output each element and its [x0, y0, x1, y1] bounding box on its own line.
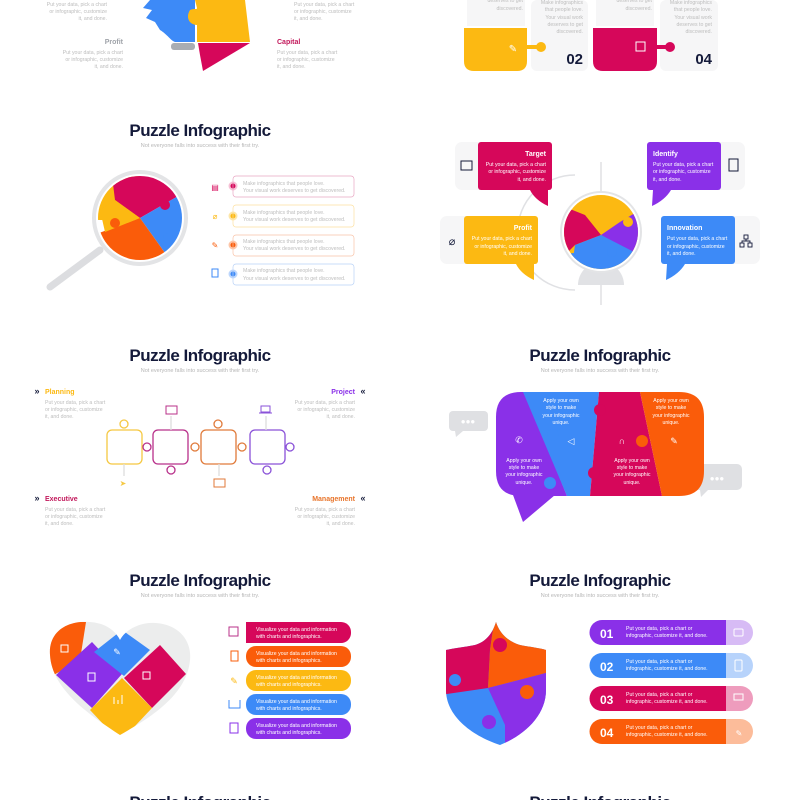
- yellow block: [464, 28, 546, 71]
- big puzzle bubble: Apply your own: [506, 458, 542, 464]
- label: Capital: [277, 39, 338, 70]
- label: Project: Put your data, pick a chart: [295, 400, 356, 406]
- magnifier graphic: [50, 160, 190, 287]
- slide: shield puzzle: [440, 571, 753, 750]
- card 02: Make infographics: [541, 0, 583, 6]
- list items: Your visual work deserves to get discovered.: [243, 188, 345, 194]
- bars list: with charts and infographics.: [256, 730, 322, 736]
- numbered bars: infographic, customize it, and done.: [626, 633, 708, 639]
- callout: Identify: Identify: [653, 151, 678, 158]
- bars list: with charts and infographics.: [256, 634, 322, 640]
- subtitle: Not everyone falls into success with their first try.: [141, 368, 260, 374]
- list items: Make infographics that people love.: [243, 239, 325, 245]
- card 04: 04: [695, 51, 713, 68]
- callout: Innovation: [661, 216, 760, 280]
- outline puzzle pieces: [107, 416, 294, 476]
- label: Executive: »: [34, 493, 40, 503]
- icons on puzzle row: ➤: [120, 479, 127, 488]
- label: Management: «: [360, 493, 366, 503]
- title: Puzzle Infographic: [129, 346, 271, 365]
- callout: Identify: [647, 142, 745, 206]
- slide: globe callouts: [440, 142, 760, 305]
- slide: outline puzzle row: [34, 346, 366, 527]
- bars list: with charts and infographics.: [256, 682, 322, 688]
- big puzzle bubble: your infographic: [506, 472, 543, 478]
- big puzzle bubble: unique.: [623, 480, 641, 486]
- label: Management: or infographic, customize: [297, 514, 355, 520]
- callout: Target: [455, 142, 552, 206]
- subtitle: Not everyone falls into success with their first try.: [141, 593, 260, 599]
- slide: puzzle cards (partial top-right): discovered.: [496, 6, 523, 12]
- slide: magnifier: [50, 121, 354, 287]
- small speech bubbles: [449, 411, 742, 497]
- numbered bars: 03: [600, 693, 614, 707]
- card 04: deserves to get: [677, 22, 713, 28]
- callout: Profit: ⌀: [449, 236, 456, 248]
- slide: puzzle cards (partial top-right): discovered.: [625, 6, 652, 12]
- label: Profit: [63, 39, 124, 70]
- numbered bars: 01: [600, 627, 614, 641]
- big puzzle bubble: Apply your own: [543, 398, 579, 404]
- big puzzle bubble: ✆: [515, 435, 523, 445]
- numbered bars: [590, 620, 753, 744]
- list items: ⌀: [213, 212, 218, 221]
- list items: Your visual work deserves to get discovered.: [243, 246, 345, 252]
- icons on puzzle row: [120, 406, 272, 488]
- list items: Make infographics that people love.: [243, 268, 325, 274]
- label: Profit: or infographic, customize: [65, 57, 123, 63]
- bars list: Visualize your data and information: [256, 627, 337, 633]
- label: Executive: [34, 493, 106, 527]
- label: Planning: [34, 386, 106, 420]
- numbered bars: Put your data, pick a chart or: [626, 626, 693, 632]
- callout: Profit: Profit: [514, 225, 533, 232]
- list items: [211, 176, 354, 285]
- big puzzle bubble: style to make: [546, 405, 576, 411]
- card 04: Make infographics: [670, 0, 712, 6]
- big puzzle bubble: Apply your own: [614, 458, 650, 464]
- heart graphic: ✎: [113, 647, 121, 657]
- text: right top: it, and done.: [294, 16, 323, 22]
- label: Profit: Profit: [105, 39, 124, 46]
- callout: Identify: or infographic, customize: [653, 169, 711, 175]
- small speech bubbles: ●●●: [710, 474, 724, 483]
- label: Capital: Put your data, pick a chart: [277, 50, 338, 56]
- callout: Target: it, and done.: [517, 177, 546, 183]
- label: Profit: it, and done.: [94, 64, 123, 70]
- subtitle: Not everyone falls into success with their first try.: [541, 368, 660, 374]
- label: Planning: or infographic, customize: [45, 407, 103, 413]
- big puzzle bubble: style to make: [509, 465, 539, 471]
- slide: speech bubble puzzle: [449, 346, 742, 522]
- text: left top: or infographic, customize: [49, 9, 107, 15]
- big puzzle bubble: your infographic: [543, 413, 580, 419]
- label: Planning: Put your data, pick a chart: [45, 400, 106, 406]
- text: right top: Put your data, pick a chart: [294, 2, 355, 8]
- label: Management: Put your data, pick a chart: [295, 507, 356, 513]
- label: Capital: or infographic, customize: [277, 57, 335, 63]
- bars list: with charts and infographics.: [256, 706, 322, 712]
- label: Profit: Put your data, pick a chart: [63, 50, 124, 56]
- card 02: 02: [566, 51, 583, 68]
- callout: Innovation: Innovation: [667, 225, 702, 232]
- card 02: deserves to get: [548, 22, 584, 28]
- callout: Identify: it, and done.: [653, 177, 682, 183]
- bars list: Visualize your data and information: [256, 723, 337, 729]
- numbered bars: 04: [600, 726, 614, 740]
- label: Executive: Put your data, pick a chart: [45, 507, 106, 513]
- bars list: Visualize your data and information: [256, 675, 337, 681]
- text: right top: or infographic, customize: [294, 9, 352, 15]
- card 02: discovered.: [556, 29, 583, 35]
- label: Capital: it, and done.: [277, 64, 306, 70]
- title: Puzzle Infographic: [129, 571, 271, 590]
- label: Management: Management: [312, 496, 356, 503]
- big puzzle bubble: style to make: [656, 405, 686, 411]
- subtitle: Not everyone falls into success with their first try.: [141, 143, 260, 149]
- card 02: that people love.: [545, 7, 583, 13]
- label: Project: it, and done.: [326, 414, 355, 420]
- card 02: [531, 0, 588, 71]
- callout: Identify: Put your data, pick a chart: [653, 162, 714, 168]
- card 04: discovered.: [685, 29, 712, 35]
- label: Project: Project: [331, 389, 356, 396]
- card 02: Your visual work: [545, 15, 583, 21]
- bars list: Visualize your data and information: [256, 651, 337, 657]
- title: Puzzle Infographic: [129, 121, 271, 140]
- numbered bars: Put your data, pick a chart or: [626, 725, 693, 731]
- slide: head puzzle (partial top-left): [47, 0, 355, 71]
- numbered bars: infographic, customize it, and done.: [626, 732, 708, 738]
- text: left top: it, and done.: [78, 16, 107, 22]
- numbered bars: ✎: [736, 729, 742, 738]
- slide: heart puzzle: [45, 571, 351, 742]
- numbered bars: Put your data, pick a chart or: [626, 659, 693, 665]
- card 04: Your visual work: [674, 15, 712, 21]
- big puzzle bubble: unique.: [662, 420, 680, 426]
- list items: Your visual work deserves to get discovered.: [243, 276, 345, 282]
- card 04: [660, 0, 718, 71]
- bars list: Visualize your data and information: [256, 699, 337, 705]
- text: left top: Put your data, pick a chart: [47, 2, 108, 8]
- callout: Profit: [440, 216, 538, 280]
- label: Project: [295, 386, 366, 420]
- numbered bars: infographic, customize it, and done.: [626, 699, 708, 705]
- label: Capital: Capital: [277, 39, 300, 46]
- callout: Innovation: or infographic, customize: [667, 244, 725, 250]
- small speech bubbles: ●●●: [461, 417, 475, 426]
- label: Project: «: [360, 386, 366, 396]
- big puzzle bubble: your infographic: [653, 413, 690, 419]
- big puzzle bubble: your infographic: [614, 472, 651, 478]
- big puzzle bubble: ∩: [619, 436, 625, 446]
- numbered bars: 02: [600, 660, 614, 674]
- callout: Innovation: it, and done.: [667, 251, 696, 257]
- label: Executive: Executive: [45, 496, 78, 503]
- big puzzle bubble: unique.: [552, 420, 570, 426]
- big puzzle bubble: Apply your own: [653, 398, 689, 404]
- big puzzle bubble: style to make: [617, 465, 647, 471]
- partial titles at bottom: [129, 793, 671, 800]
- yellow block: ✎: [509, 44, 517, 55]
- text: right top: [294, 2, 355, 22]
- big puzzle bubble: unique.: [515, 480, 533, 486]
- label: Planning: Planning: [45, 389, 75, 396]
- title: Puzzle Infographic: [529, 346, 671, 365]
- list items: Make infographics that people love.: [243, 210, 325, 216]
- subtitle: Not everyone falls into success with their first try.: [541, 593, 660, 599]
- callout: Target: or infographic, customize: [488, 169, 546, 175]
- callout: Target: Target: [525, 151, 547, 158]
- big puzzle bubble: ◁: [568, 436, 575, 446]
- bars list: ✎: [230, 676, 238, 686]
- globe: [518, 162, 645, 305]
- label: Executive: it, and done.: [45, 521, 74, 527]
- callout: Target: Put your data, pick a chart: [486, 162, 547, 168]
- label: Planning: »: [34, 386, 40, 396]
- callout: Innovation: Put your data, pick a chart: [667, 236, 728, 242]
- big puzzle bubble: ✎: [670, 436, 678, 446]
- numbered bars: Put your data, pick a chart or: [626, 692, 693, 698]
- slide: puzzle cards (partial top-right): [464, 0, 718, 71]
- heart graphic: [45, 622, 190, 742]
- bars list: with charts and infographics.: [256, 658, 322, 664]
- list items: Your visual work deserves to get discovered.: [243, 217, 345, 223]
- big puzzle bubble: [496, 392, 704, 522]
- list items: ▤: [211, 183, 219, 192]
- callout: Profit: it, and done.: [503, 251, 532, 257]
- shield graphic: [446, 622, 546, 745]
- callout: Profit: or infographic, customize: [474, 244, 532, 250]
- text: left top: [47, 2, 108, 22]
- numbered bars: infographic, customize it, and done.: [626, 666, 708, 672]
- label: Management: [295, 493, 366, 527]
- list items: Make infographics that people love.: [243, 181, 325, 187]
- list items: ✎: [212, 241, 218, 250]
- head puzzle graphic: [143, 0, 250, 71]
- pink block: [593, 28, 675, 71]
- callout: Profit: Put your data, pick a chart: [472, 236, 533, 242]
- label: Management: it, and done.: [326, 521, 355, 527]
- title: Puzzle Infographic: [529, 571, 671, 590]
- label: Project: or infographic, customize: [297, 407, 355, 413]
- card 04: that people love.: [674, 7, 712, 13]
- label: Executive: or infographic, customize: [45, 514, 103, 520]
- label: Planning: it, and done.: [45, 414, 74, 420]
- bars list: [229, 622, 351, 739]
